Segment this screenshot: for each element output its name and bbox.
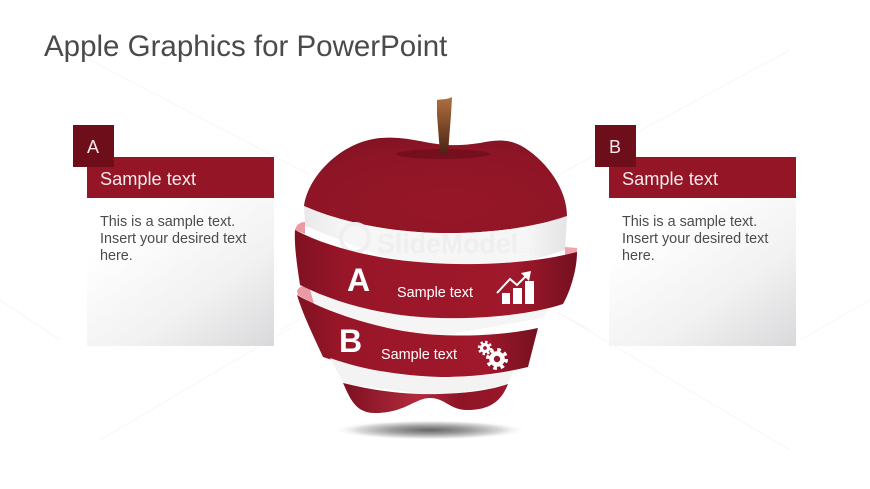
label B sample text: Sample text (381, 347, 457, 363)
panel B text block: This is a sample text. (622, 214, 757, 230)
pink inner right (565, 247, 577, 256)
title: Apple Graphics for PowerPoint (44, 30, 447, 63)
panel A heading (87, 157, 274, 198)
panel A text block: here. (100, 248, 133, 264)
panel: B (595, 125, 796, 346)
pink inner lower (297, 286, 314, 304)
panel A text block: This is a sample text. (100, 214, 235, 230)
watermark: SlideModel (377, 228, 518, 259)
label B: B (339, 323, 362, 359)
panel A letter tag (73, 125, 114, 167)
panel: A (73, 125, 274, 346)
label A sample text: Sample text (397, 285, 473, 301)
icon: growth chart (497, 271, 534, 304)
panel B text block: here. (622, 248, 655, 264)
panel A letter tag: A (87, 137, 99, 157)
apple top (304, 138, 567, 233)
ribbon A (295, 230, 577, 318)
white band lower (330, 358, 514, 396)
panel B heading: Sample text (622, 169, 718, 189)
label A: A (347, 262, 370, 298)
pink and white band middle (297, 285, 550, 336)
panel B text block (609, 198, 796, 346)
shadow (333, 420, 527, 440)
watermark: .com (518, 245, 540, 256)
icon: gears (479, 342, 506, 368)
panel B text block: Insert your desired text (622, 231, 768, 247)
white band top (304, 206, 567, 266)
watermark (341, 224, 540, 259)
stem shadow (396, 149, 490, 159)
pink inner left (295, 222, 305, 234)
apple bottom (343, 383, 508, 413)
stem (437, 97, 452, 153)
panel B letter tag: B (609, 137, 621, 157)
panel A heading: Sample text (100, 169, 196, 189)
ribbon B (297, 295, 538, 377)
panel A text block (87, 198, 274, 346)
panel B heading (609, 157, 796, 198)
panel A text block: Insert your desired text (100, 231, 246, 247)
panel B letter tag (595, 125, 636, 167)
